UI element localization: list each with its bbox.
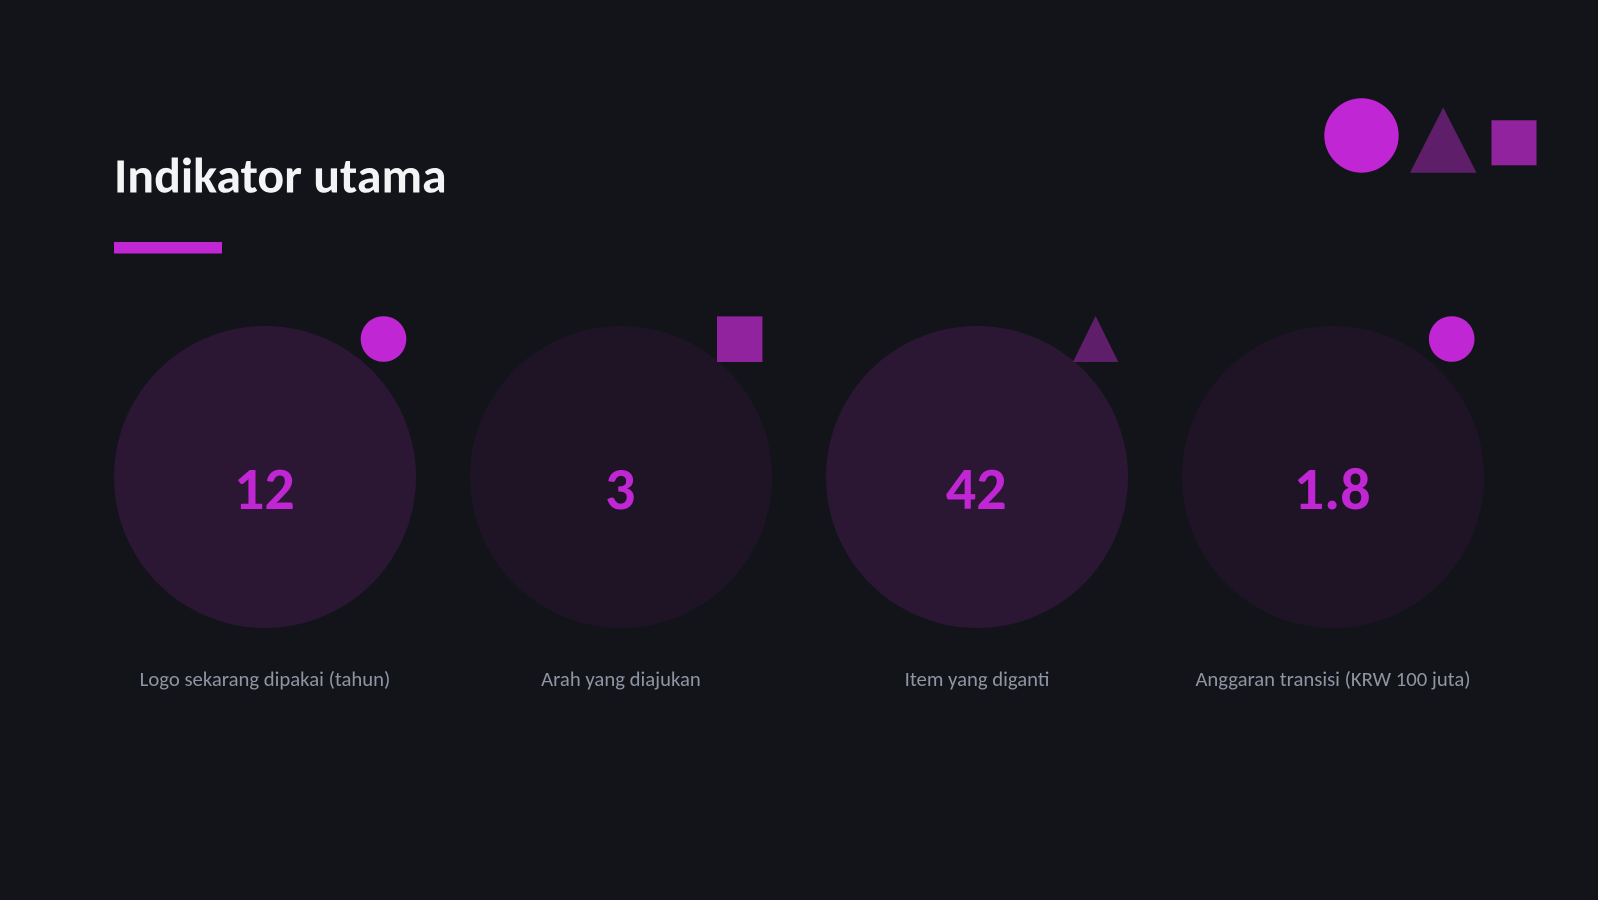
title: Indikator utama: [114, 146, 447, 206]
icon: square: [717, 316, 762, 362]
panel: transition budget: [1182, 316, 1484, 692]
number: 42: [946, 453, 1007, 526]
panel: proposed directions: [470, 316, 772, 692]
label: Item yang diganti: [905, 666, 1049, 692]
metric circle: [826, 326, 1128, 628]
panel: items replaced: [826, 316, 1128, 692]
icon: large square: [1492, 120, 1536, 165]
icon: circle: [361, 316, 406, 362]
metric circle: [1182, 326, 1484, 628]
number: 12: [234, 453, 295, 526]
label: Arah yang diajukan: [541, 666, 701, 692]
decorative shape group: circle, triangle, square: [1324, 98, 1536, 173]
metric circle: [470, 326, 772, 628]
number: 1.8: [1294, 453, 1371, 526]
metric circle: [114, 326, 416, 628]
icon: triangle: [1073, 316, 1118, 362]
label: Anggaran transisi (KRW 100 juta): [1195, 666, 1471, 692]
label: Logo sekarang dipakai (tahun): [140, 666, 390, 692]
number: 3: [605, 453, 635, 526]
icon: large circle: [1324, 98, 1399, 173]
title accent bar: [114, 242, 222, 254]
panel: logo years: [114, 316, 416, 692]
icon: large triangle: [1410, 108, 1476, 173]
icon: circle: [1429, 316, 1474, 362]
